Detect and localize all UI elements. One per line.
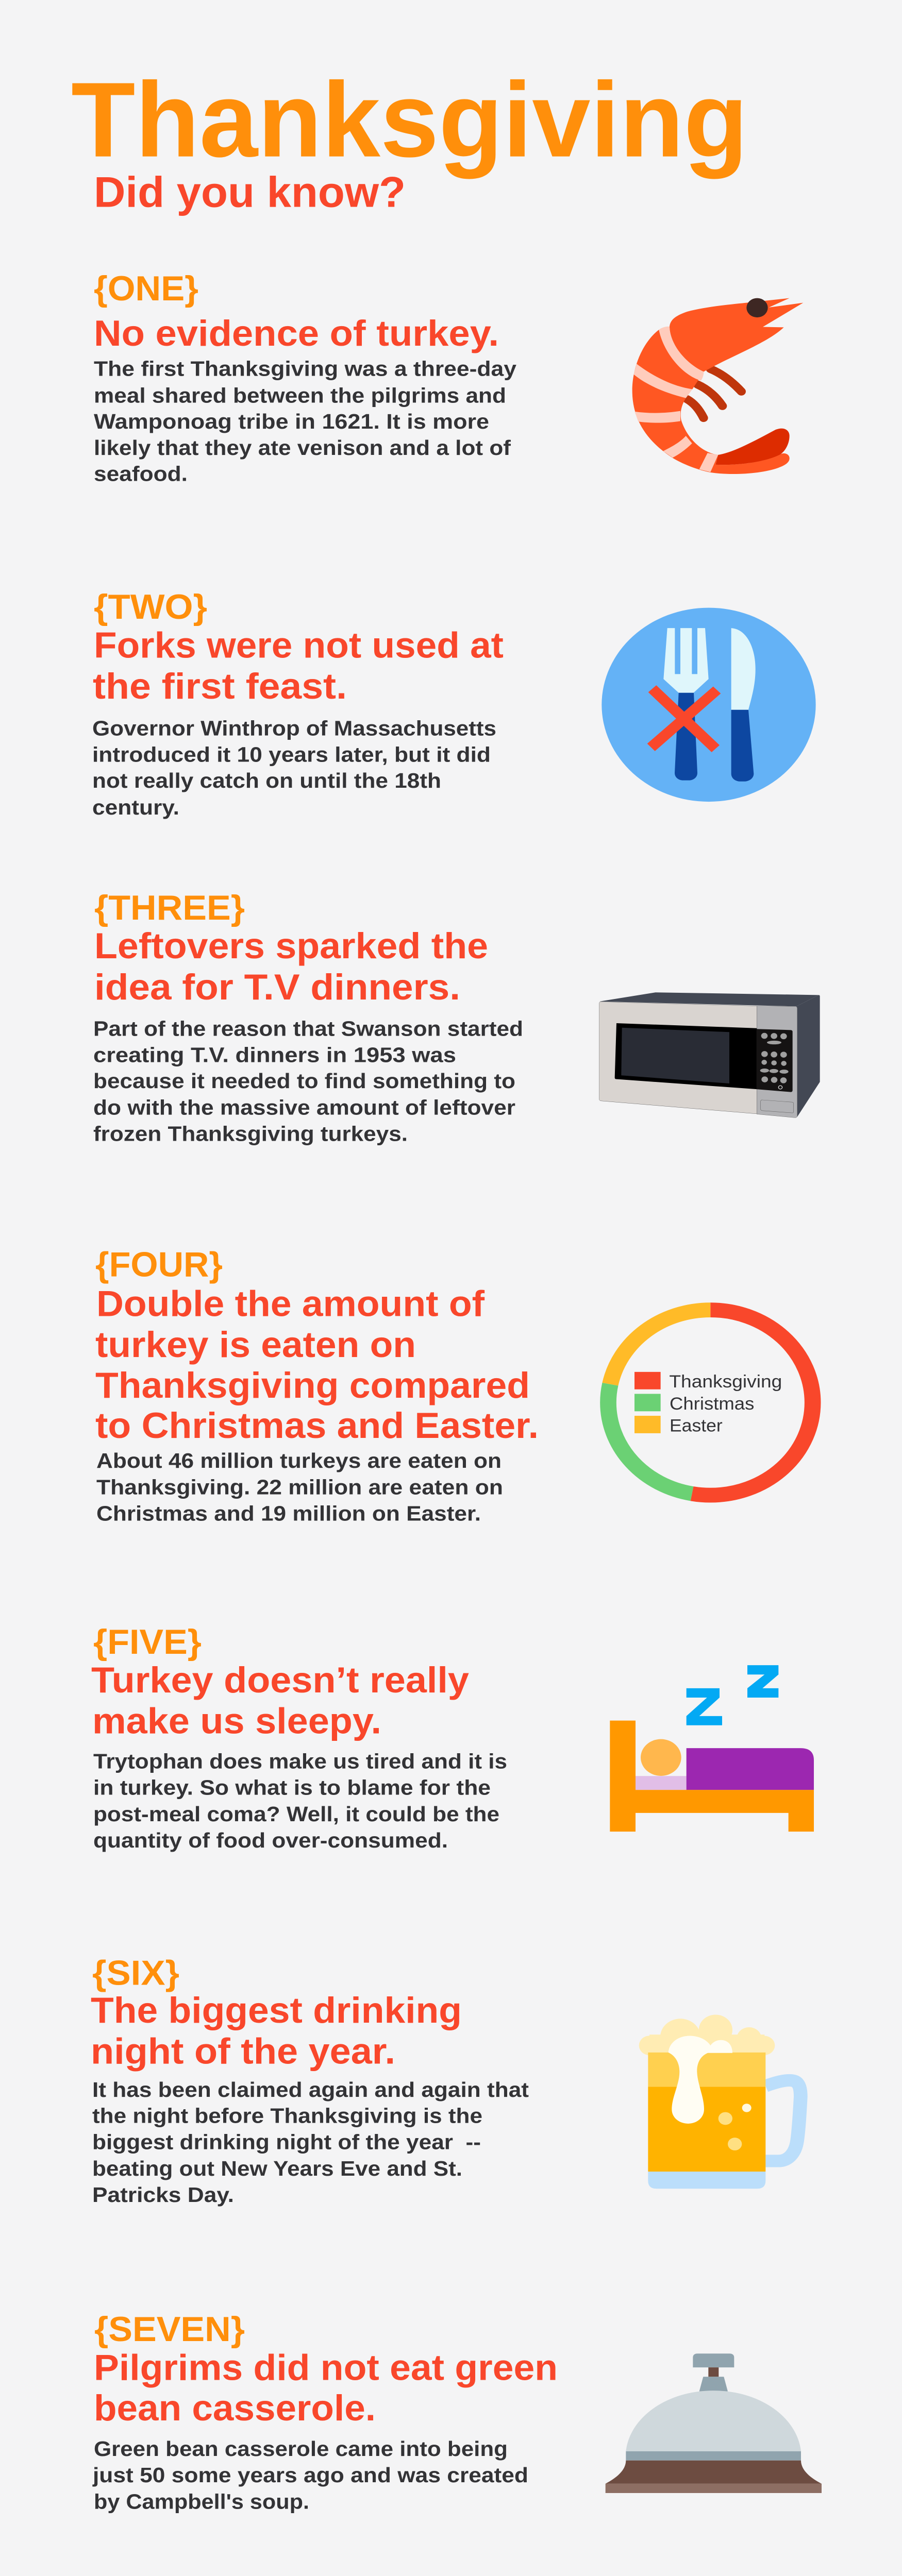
heading: make us sleepy.: [92, 1701, 381, 1741]
icon: person sleeping in bed: [610, 1665, 814, 1832]
icon: service bell: [606, 2353, 822, 2493]
body text: Governor Winthrop of Massachusetts: [92, 717, 496, 740]
chart legend: Christmas: [670, 1394, 754, 1414]
body text: likely that they ate venison and a lot of: [94, 436, 511, 460]
body text: Christmas and 19 million on Easter.: [96, 1502, 481, 1526]
panel: fact seven: [92, 2310, 822, 2514]
panel: fact four: [95, 1245, 813, 1526]
heading: The biggest drinking: [91, 1990, 462, 2030]
number tag: {SIX}: [92, 1954, 179, 1993]
panel: fact two: [92, 587, 816, 819]
icon: microwave: [599, 992, 820, 1117]
body text: The first Thanksgiving was a three-day: [94, 358, 516, 381]
body text: creating T.V. dinners in 1953 was: [93, 1043, 456, 1067]
number tag: {FOUR}: [95, 1245, 223, 1284]
body text: [92, 2078, 529, 2207]
body text: Wamponoag tribe in 1621. It is more: [94, 410, 489, 434]
body text: Part of the reason that Swanson started: [93, 1017, 523, 1041]
heading: [94, 2347, 558, 2428]
heading: [95, 1283, 539, 1446]
icon: fork and knife crossed out: [602, 608, 816, 802]
panel: fact one: [94, 269, 803, 486]
number tag: {TWO}: [94, 587, 207, 626]
body text: Green bean casserole came into being: [94, 2437, 508, 2461]
heading: [93, 625, 504, 706]
icon: shrimp: [632, 298, 803, 474]
number tag: {ONE}: [94, 269, 198, 308]
body text: [92, 717, 496, 819]
body text: in turkey. So what is to blame for the: [93, 1776, 491, 1800]
donut chart: [608, 1310, 813, 1495]
body text: About 46 million turkeys are eaten on: [96, 1449, 502, 1472]
number tag: {FIVE}: [93, 1622, 202, 1662]
body text: do with the massive amount of leftover: [93, 1096, 515, 1120]
body text: post-meal coma? Well, it could be the: [93, 1803, 499, 1826]
body text: by Campbell's soup.: [94, 2490, 309, 2514]
heading: Pilgrims did not eat green: [94, 2347, 558, 2387]
heading: night of the year.: [91, 2031, 395, 2072]
heading: [91, 1990, 462, 2072]
heading: No evidence of turkey.: [94, 313, 499, 353]
heading: [91, 1659, 469, 1741]
body text: Thanksgiving. 22 million are eaten on: [96, 1476, 503, 1499]
body text: [93, 1017, 523, 1146]
chart legend: [634, 1371, 782, 1435]
heading: Double the amount of: [96, 1283, 485, 1324]
body text: [94, 358, 516, 486]
body text: [96, 1449, 503, 1526]
body text: meal shared between the pilgrims and: [94, 384, 506, 408]
heading: Forks were not used at: [94, 625, 504, 665]
heading: idea for T.V dinners.: [94, 967, 460, 1007]
body text: [92, 2437, 528, 2514]
body text: biggest drinking night of the year --: [92, 2130, 481, 2154]
body text: seafood.: [94, 463, 188, 486]
number tag: {THREE}: [94, 888, 245, 927]
body text: beating out New Years Eve and St.: [92, 2157, 462, 2181]
heading: turkey is eaten on: [95, 1325, 416, 1365]
heading: the first feast.: [93, 666, 347, 706]
number tag: {SEVEN}: [94, 2310, 245, 2349]
body text: [93, 1750, 507, 1852]
body text: Trytophan does make us tired and it is: [93, 1750, 507, 1773]
heading: Thanksgiving compared: [95, 1365, 530, 1405]
heading: [94, 925, 488, 1007]
chart legend: Thanksgiving: [669, 1371, 782, 1391]
body text: because it needed to find something to: [93, 1070, 515, 1093]
body text: introduced it 10 years later, but it did: [92, 743, 491, 767]
body text: just 50 some years ago and was created: [92, 2464, 528, 2487]
body text: Patricks Day.: [92, 2183, 234, 2207]
body text: century.: [92, 796, 179, 819]
body text: It has been claimed again and again that: [92, 2078, 529, 2102]
chart legend: Easter: [670, 1416, 723, 1435]
panel: fact five: [91, 1622, 814, 1852]
icon: beer mug: [639, 2014, 800, 2189]
body text: the night before Thanksgiving is the: [92, 2105, 482, 2128]
panel: fact three: [93, 888, 820, 1146]
subtitle: Did you know?: [94, 168, 406, 216]
body text: frozen Thanksgiving turkeys.: [93, 1122, 408, 1146]
heading: Turkey doesn’t really: [91, 1659, 469, 1700]
heading: to Christmas and Easter.: [95, 1405, 539, 1446]
body text: quantity of food over-consumed.: [93, 1829, 448, 1852]
title: Thanksgiving: [71, 61, 748, 179]
panel: fact six: [91, 1954, 800, 2207]
heading: Leftovers sparked the: [94, 925, 488, 966]
heading: bean casserole.: [94, 2388, 376, 2428]
body text: not really catch on until the 18th: [92, 769, 441, 793]
